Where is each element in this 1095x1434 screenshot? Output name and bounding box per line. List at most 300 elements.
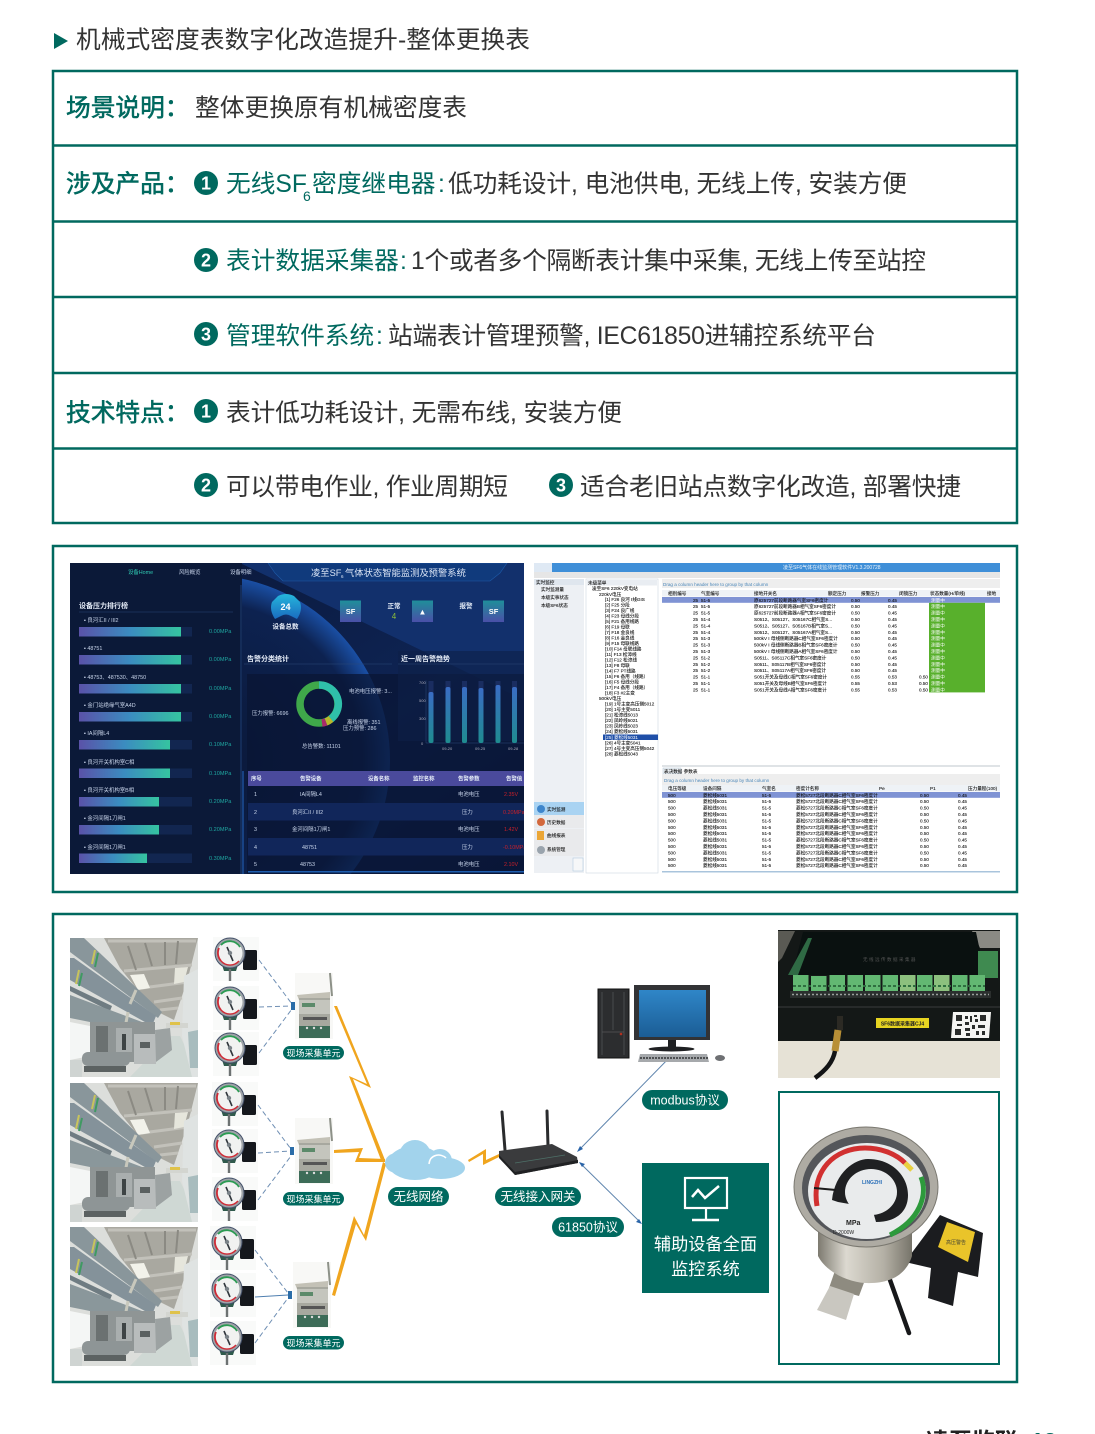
alarm table: 48751 xyxy=(302,845,317,851)
lower data grid: 0.50 xyxy=(920,793,929,798)
lower data grid: 0.45 xyxy=(958,857,967,862)
upper data grid: 51-4 xyxy=(701,630,711,635)
device tree: [7] F18 金良线 xyxy=(605,629,635,636)
row: product 1: 1 xyxy=(201,174,211,194)
device total badge xyxy=(271,594,301,630)
upper data grid: 测量中 xyxy=(931,654,945,661)
device tree: [9] F15 母联线路 xyxy=(605,640,639,647)
row: product 2: 表计数据采集器 xyxy=(226,247,399,275)
lower data grid: 表决数据 参数表 xyxy=(664,768,698,775)
upper data grid: S0512、S05127、S05167A相气室S... xyxy=(754,629,832,636)
device tree: [4] F23 母线分段 xyxy=(605,612,639,620)
upper data grid: 500kV I 母线侧断路器A相气室SF6密度计 xyxy=(754,648,838,655)
device tree: [15] F6 备用（线路） xyxy=(605,673,648,680)
lower data grid: 0.45 xyxy=(958,818,967,823)
upper data grid: 25 xyxy=(693,630,699,635)
collector units xyxy=(288,973,333,1328)
upper data grid: 测量中 xyxy=(931,635,945,642)
device tree: 凌至SF6 220kV变电站 xyxy=(592,585,638,592)
lower data grid: 51-5 xyxy=(762,825,772,830)
device tree: [6] F19 母联 xyxy=(605,624,630,630)
lower data grid: 菱松5727北段断路器C相气室SF6密度计 xyxy=(796,856,878,863)
lower data grid: 压力量程(100) xyxy=(968,785,998,792)
device tree: [14] F7 PT线路 xyxy=(605,668,636,674)
alarm table: 48753 xyxy=(300,862,315,868)
upper data grid: 51-5 xyxy=(701,598,711,603)
lower data grid: 菱松5727北段断路器C相气室SF6密度计 xyxy=(796,817,878,824)
monitoring system box xyxy=(642,1163,769,1293)
upper data grid: 0.50 xyxy=(851,598,860,603)
upper data grid: 闭锁压力 xyxy=(899,590,918,597)
pressure ranking bars: ▪ 金门站绝缘气室A4D xyxy=(84,701,136,709)
lower data grid: 51-5 xyxy=(762,812,772,817)
row: scenario description: 场景说明： xyxy=(66,94,189,122)
upper data grid: 原625727前段断路器B相气室SF6密度计 xyxy=(754,603,836,610)
upper data grid: 25 xyxy=(693,643,699,648)
upper data grid: 500kV I 母线侧断路器C相气室SF6密度计 xyxy=(754,635,838,642)
lower data grid: 500 xyxy=(668,812,676,817)
upper data grid: 0.45 xyxy=(888,598,897,603)
lower data grid: 500 xyxy=(668,799,676,804)
upper data grid: 0.50 xyxy=(919,687,928,692)
upper data grid: S0511、S05117B相气室SF6密度计 xyxy=(754,661,826,668)
lower data grid: 菱松线5031 xyxy=(703,817,727,824)
upper data grid: 51-4 xyxy=(701,617,711,622)
upper data grid: 51-4 xyxy=(701,623,711,628)
arrow: gateway to monitoring system xyxy=(579,1162,642,1224)
data collector photo xyxy=(778,930,1000,1078)
61850 protocol label: 61850协议 xyxy=(558,1220,618,1234)
device tree: [23] 凤岭线5023 xyxy=(605,722,638,730)
system software screenshot: 凌至SF6气体在线监测管理软件V1.3.200728 xyxy=(783,564,881,571)
navigation sidebar: 曲线报表 xyxy=(547,832,566,839)
upper data grid: 0.45 xyxy=(888,611,897,616)
device tree: [18] F3 #2主变 xyxy=(605,690,635,696)
61850 protocol label xyxy=(552,1217,624,1237)
navigation sidebar: 实时监测量 xyxy=(541,586,564,593)
upper data grid: 0.53 xyxy=(888,687,897,692)
upper data grid: 测量中 xyxy=(931,616,945,623)
device tree: [26] 4号主变5041 xyxy=(605,740,641,746)
alarm table: 2 xyxy=(254,810,257,816)
device total badge: 24 xyxy=(280,602,291,612)
upper data grid: 51-2 xyxy=(701,668,711,673)
lower data grid: 菱松线5031 xyxy=(703,830,727,837)
row: scenario description: 整体更换原有机械密度表 xyxy=(195,94,467,122)
dashboard header: 气体状态智能监测及预警系统 xyxy=(345,567,466,578)
arrow: computer to gateway xyxy=(577,1055,672,1152)
weekly alarm bar chart: 09-20 xyxy=(442,746,453,751)
pressure ranking bars xyxy=(79,585,241,874)
device tree: [2] F25 分段 xyxy=(605,602,630,608)
upper data grid: 51-2 xyxy=(701,655,711,660)
device tree: [16] F5 母线分段 xyxy=(605,678,639,686)
alarm table: 告警设备 xyxy=(300,774,322,782)
icon: monitor with trend line xyxy=(685,1178,727,1220)
upper data grid: 0.55 xyxy=(851,675,860,680)
lower data grid: 0.45 xyxy=(958,812,967,817)
upper data grid: 0.45 xyxy=(888,655,897,660)
alarm donut chart: 压力预警: 286 xyxy=(343,724,377,732)
weekly alarm bar chart: 700 xyxy=(419,680,426,685)
monitoring system box: 监控系统 xyxy=(671,1259,740,1279)
dashboard header: 设备明细 xyxy=(230,568,252,576)
upper data grid: 0.50 xyxy=(851,668,860,673)
lower data grid: 51-5 xyxy=(762,818,772,823)
density relay photo xyxy=(779,1092,999,1364)
row: product 2: 2 xyxy=(201,250,211,270)
upper data grid: 0.45 xyxy=(888,630,897,635)
upper data grid: 测量中 xyxy=(931,642,945,649)
upper data grid: 51-5 xyxy=(701,611,711,616)
pressure ranking bars: ▪ 良河开关机构室C相 xyxy=(84,758,134,766)
row: product 1: 无线SF xyxy=(226,170,307,198)
pressure ranking bars: 0.10MPa xyxy=(209,742,232,748)
upper data grid: 测量中 xyxy=(931,610,945,617)
upper data grid: 25 xyxy=(693,611,699,616)
pressure ranking bars: ▪ IA间隔L4 xyxy=(84,729,109,737)
upper data grid: 0.50 xyxy=(851,636,860,641)
alarm donut chart: 总告警数: 11101 xyxy=(302,742,341,750)
lower data grid: 0.50 xyxy=(920,863,929,868)
alarm donut chart: 离线报警: 351 xyxy=(347,718,381,726)
row: product 3: : xyxy=(376,323,383,350)
gateway label: 无线接入网关 xyxy=(500,1189,576,1204)
lower data grid: 菱松线5031 xyxy=(703,811,727,818)
device tree: [10] F14 母联线路 xyxy=(605,646,642,652)
alarm table: -0.10MPa xyxy=(503,845,526,851)
pressure ranking bars: 0.20MPa xyxy=(209,827,232,833)
lower data grid: 菱松5727北段断路器C相气室SF6密度计 xyxy=(796,824,878,831)
row: feature 1: 技术特点： xyxy=(66,399,189,427)
weekly alarm bar chart: 09-25 xyxy=(475,746,486,751)
upper data grid: 测量中 xyxy=(931,686,945,693)
upper data grid: 25 xyxy=(693,675,699,680)
row: product 2 xyxy=(194,247,926,275)
weekly alarm bar chart: 近一周告警趋势 xyxy=(401,654,450,663)
upper data grid: 25 xyxy=(693,623,699,628)
row: features 2 and 3 xyxy=(194,473,961,501)
device tree: [17] F4 备用（线路） xyxy=(605,684,648,691)
upper data grid: 0.55 xyxy=(851,681,860,686)
upper data grid: 测量中 xyxy=(931,674,945,681)
lower data grid: 0.50 xyxy=(920,850,929,855)
lower data grid: 菱松5727北段断路器C相气室SF6密度计 xyxy=(796,811,878,818)
upper data grid: 0.45 xyxy=(888,668,897,673)
lower data grid: 菱松线5031 xyxy=(703,837,727,844)
upper data grid: 0.45 xyxy=(888,643,897,648)
pressure ranking bars: ▪ 金河间隔1刀闸1 xyxy=(84,814,126,822)
lower data grid: 51-5 xyxy=(762,844,772,849)
lower data grid: 0.45 xyxy=(958,793,967,798)
upper data grid: 测量中 xyxy=(931,622,945,629)
alarm table: 4 xyxy=(254,845,257,851)
status tiles: 正常 xyxy=(388,601,401,610)
device tree: [11] F13 松漳线 xyxy=(605,651,637,658)
upper data grid: S0511、S05117A相气室SF6密度计 xyxy=(754,667,826,674)
lower data grid: 气室名 xyxy=(762,785,776,792)
lower data grid: 500 xyxy=(668,831,676,836)
upper data grid: 测量中 xyxy=(931,648,945,655)
pressure ranking bars: 0.00MPa xyxy=(209,629,232,635)
wireless network label: 无线网络 xyxy=(393,1189,444,1204)
icon: QR code xyxy=(951,1012,991,1038)
pressure ranking bars: 0.00MPa xyxy=(209,657,232,663)
upper data grid: 接地 xyxy=(987,590,997,597)
gauge dial: MPa xyxy=(846,1220,860,1227)
device tree: 未级菜单 xyxy=(588,580,607,586)
gauge fitting xyxy=(817,1262,868,1320)
pressure ranking bars: 0.00MPa xyxy=(209,714,232,720)
upper data grid: 51-2 xyxy=(701,662,711,667)
lower data grid: 密度计名称 xyxy=(796,785,819,792)
alarm table: 1 xyxy=(254,792,257,798)
device tree: [8] F16 金良线 xyxy=(605,634,635,642)
row: product 2: : xyxy=(400,248,407,275)
upper data grid: 测量中 xyxy=(931,603,945,610)
panel: scenario table xyxy=(53,71,1017,523)
lower data grid: Pe xyxy=(879,786,885,791)
upper data grid: 0.45 xyxy=(888,623,897,628)
collector unit labels: 现场采集单元 xyxy=(286,1338,341,1348)
density gauges xyxy=(210,937,259,1365)
lower data grid: 0.50 xyxy=(920,831,929,836)
alarm donut chart: 告警分类统计 xyxy=(247,654,289,663)
lower data grid: 菱松线5031 xyxy=(703,824,727,831)
lower data grid: 0.45 xyxy=(958,831,967,836)
alarm table: 2.10V xyxy=(504,862,518,868)
wireless network label xyxy=(388,1187,449,1206)
lower data grid: 菱松线5031 xyxy=(703,856,727,863)
navigation sidebar: 系统管理 xyxy=(547,846,566,853)
lower data grid: 51-5 xyxy=(762,793,772,798)
upper data grid: 0.45 xyxy=(888,604,897,609)
lower data grid: 500 xyxy=(668,806,676,811)
wireless gateway router xyxy=(499,1111,578,1175)
device tree: [12] F12 松漳线 xyxy=(605,656,637,664)
upper data grid: 0.45 xyxy=(888,636,897,641)
upper data grid: 额定压力 xyxy=(828,590,847,597)
weekly alarm bar chart: 09-28 xyxy=(508,746,519,751)
pressure ranking bars: 0.00MPa xyxy=(209,686,232,692)
upper data grid: 500kV I 母线侧断路器B相气室SF6密度计 xyxy=(754,642,838,649)
lower data grid: 菱松线5031 xyxy=(703,849,727,856)
upper data grid: 25 xyxy=(693,649,699,654)
lower data grid: 0.45 xyxy=(958,850,967,855)
status tiles: 4 xyxy=(392,612,397,621)
upper data grid: 0.50 xyxy=(851,604,860,609)
upper data grid: 0.53 xyxy=(888,681,897,686)
title: 机械式密度表数字化改造提升-整体更换表 xyxy=(76,26,530,54)
alarm table: 5 xyxy=(254,862,257,868)
upper data grid: 0.50 xyxy=(851,662,860,667)
status tiles: SF xyxy=(346,607,356,616)
lower data grid: 0.45 xyxy=(958,844,967,849)
lower data grid: 51-5 xyxy=(762,799,772,804)
panel: system topology xyxy=(53,914,1017,1382)
alarm donut chart: 压力报警: 6696 xyxy=(252,709,289,717)
status tiles: 报警 xyxy=(460,601,473,610)
device tree: [20] 1号主变5011 xyxy=(605,706,641,713)
upper data grid: 测量中 xyxy=(931,597,945,604)
row: product 3: 管理软件系统 xyxy=(226,322,374,350)
row: product 1: 密度继电器 xyxy=(312,170,435,198)
device tree: [24] 菱松线5031 xyxy=(605,728,638,735)
weekly alarm bar chart: 500 xyxy=(419,698,426,703)
lower data grid: 0.50 xyxy=(920,857,929,862)
device tree: [25] 菱松线5031 xyxy=(605,734,638,741)
gauge-to-collector dashed links xyxy=(255,960,292,1343)
upper data grid: 原625727前段断路器气室SF6密度计 xyxy=(754,597,829,604)
upper data grid: 51-5 xyxy=(701,604,711,609)
collector unit labels: 现场采集单元 xyxy=(286,1194,341,1204)
row: product 1: 涉及产品： xyxy=(66,170,189,198)
device tree: [1] F26 良河 I线GIS xyxy=(605,596,645,603)
device tree: 500kV电压 xyxy=(599,695,622,702)
upper data grid: 原625727前段断路器A相气室SF6密度计 xyxy=(754,610,836,617)
modbus protocol label xyxy=(642,1090,728,1110)
upper data grid: 25 xyxy=(693,655,699,660)
device tree: [21] 松漳线5013 xyxy=(605,712,638,718)
lower data grid: 菱松5727北段断路器C相气室SF6密度计 xyxy=(796,862,878,869)
alarm table: 压力 xyxy=(462,843,473,851)
upper data grid: 0.55 xyxy=(851,687,860,692)
lower data grid: 0.45 xyxy=(958,825,967,830)
modbus protocol label: modbus协议 xyxy=(650,1092,720,1108)
upper data grid: 状态数量(H/单线) xyxy=(930,590,966,597)
pressure ranking bars: ▪ 金河间隔1刀闸1 xyxy=(84,843,126,851)
alarm table: 告警参数 xyxy=(458,774,480,782)
data collector photo: 无线远传数据采集器 xyxy=(863,956,917,963)
row: feature 1: 1 xyxy=(201,402,211,422)
row: feature 1 xyxy=(66,399,622,427)
alarm table: 监控名称 xyxy=(413,774,435,782)
lower data grid: 菱松5727北段断路器C相气室SF6密度计 xyxy=(796,837,878,844)
collector unit labels: 现场采集单元 xyxy=(286,1048,341,1058)
upper data grid: 25 xyxy=(693,636,699,641)
lower data grid: 51-5 xyxy=(762,850,772,855)
gauge body xyxy=(818,1225,912,1283)
lower data grid: 500 xyxy=(668,818,676,823)
upper data grid xyxy=(662,579,1000,693)
lower data grid: 设备间隔 xyxy=(703,785,722,792)
lower data grid: 菱松线5031 xyxy=(703,798,727,805)
lower data grid: 51-5 xyxy=(762,857,772,862)
dashboard screenshot xyxy=(70,563,524,874)
device tree: [13] F8 母联 xyxy=(605,662,630,669)
upper data grid: 0.50 xyxy=(919,675,928,680)
upper data grid: 测量中 xyxy=(931,667,945,674)
panel: software screenshots xyxy=(52,544,1018,894)
navigation sidebar: 实时监测 xyxy=(547,806,566,813)
row: scenario description xyxy=(66,94,467,122)
pressure ranking bars: ▪ 良河汇II / III2 xyxy=(84,616,119,624)
alarm table: 序号 xyxy=(251,774,262,782)
dashboard header: 凌至SF xyxy=(311,567,342,578)
dashboard header: 6 xyxy=(341,574,344,579)
lower data grid: 51-5 xyxy=(762,838,772,843)
pressure ranking bars: ▪ 48751 xyxy=(84,646,102,652)
upper data grid: S051开关及母线B相气室SF6密度计 xyxy=(754,680,827,687)
upper data grid: 25 xyxy=(693,604,699,609)
upper data grid: 25 xyxy=(693,668,699,673)
device total badge: 设备总数 xyxy=(272,622,299,630)
device tree: [28] 菱松线5043 xyxy=(605,750,638,758)
lower data grid xyxy=(662,765,1000,872)
upper data grid: 0.45 xyxy=(888,649,897,654)
lower data grid: 菱松5727北段断路器C相气室SF6密度计 xyxy=(796,798,878,805)
upper data grid: 0.50 xyxy=(851,611,860,616)
lower data grid: 0.45 xyxy=(958,863,967,868)
upper data grid: 气室编号 xyxy=(701,590,720,597)
alarm table: 电池电压 xyxy=(458,825,480,833)
device tree: [27] 4号主变高压侧5042 xyxy=(605,745,655,752)
upper data grid: 51-1 xyxy=(701,681,711,686)
lower data grid: 500 xyxy=(668,825,676,830)
pressure ranking bars: ▪ 良河开关机构室B相 xyxy=(84,786,134,794)
status tiles: SF xyxy=(489,607,499,616)
navigation sidebar: 本级实事状态 xyxy=(541,594,569,601)
row: product 3: 3 xyxy=(201,324,211,344)
alarm table: 设备名称 xyxy=(368,774,390,782)
upper data grid: S0512、S05127、S05167C相气室S... xyxy=(754,616,832,623)
alarm table: IA间隔L4 xyxy=(300,790,322,798)
upper data grid: S0511、S05117C相气室SF6密度计 xyxy=(754,654,827,661)
device tree: [5] F21 备用线路 xyxy=(605,618,639,625)
gauge dial: D-2000W xyxy=(833,1230,854,1236)
upper data grid: 25 xyxy=(693,662,699,667)
lower data grid: 菱松线5031 xyxy=(703,805,727,812)
monitoring system box: 辅助设备全面 xyxy=(654,1234,757,1254)
lower data grid: 0.45 xyxy=(958,806,967,811)
navigation sidebar xyxy=(534,579,584,873)
lower data grid: 51-5 xyxy=(762,863,772,868)
upper data grid: S051开关及母线C相气室SF6密度计 xyxy=(754,674,827,681)
pressure ranking bars: 0.30MPa xyxy=(209,856,232,862)
upper data grid: 0.53 xyxy=(888,675,897,680)
alarm donut chart xyxy=(244,654,392,750)
lower data grid: P1 xyxy=(930,786,936,791)
row: product 1 xyxy=(66,170,907,204)
substation photos xyxy=(70,938,200,1366)
lower data grid: 菱松5727北段断路器C相气室SF6密度计 xyxy=(796,805,878,812)
lower data grid: 51-5 xyxy=(762,831,772,836)
device tree: [22] 凤岭线5021 xyxy=(605,717,638,724)
lower data grid: 0.50 xyxy=(920,806,929,811)
upper data grid: 测量中 xyxy=(931,661,945,668)
row: product 1: 低功耗设计, 电池供电, 无线上传, 安装方便 xyxy=(448,170,907,198)
alarm table xyxy=(243,771,526,874)
lower data grid: 0.45 xyxy=(958,799,967,804)
alarm table: 0.20MPa xyxy=(503,810,525,816)
row: features 2 and 3: 可以带电作业, 作业周期短 xyxy=(226,473,508,501)
gauge cable connector: 高压警告 xyxy=(946,1239,966,1246)
upper data grid: 25 xyxy=(693,598,699,603)
lower data grid: 菱松5727北段断路器C相气室SF6密度计 xyxy=(796,849,878,856)
lower data grid: 0.50 xyxy=(920,825,929,830)
row: product 3: 站端表计管理预警, IEC61850进辅控系统平台 xyxy=(388,322,876,350)
status tiles: ▲ xyxy=(419,608,426,616)
alarm table: 3 xyxy=(254,827,257,833)
system software screenshot xyxy=(534,563,1000,873)
row: product 1: 6 xyxy=(303,188,311,204)
wireless network cloud xyxy=(385,1140,465,1180)
lower data grid: 0.50 xyxy=(920,844,929,849)
lower data grid: 菱松5727北段断路器C相气室SF6密度计 xyxy=(796,843,878,850)
alarm table: 1.42V xyxy=(504,827,518,833)
dashboard header: 设备Home xyxy=(128,568,153,576)
device tree: [19] 1号主变高压侧5012 xyxy=(605,700,655,708)
